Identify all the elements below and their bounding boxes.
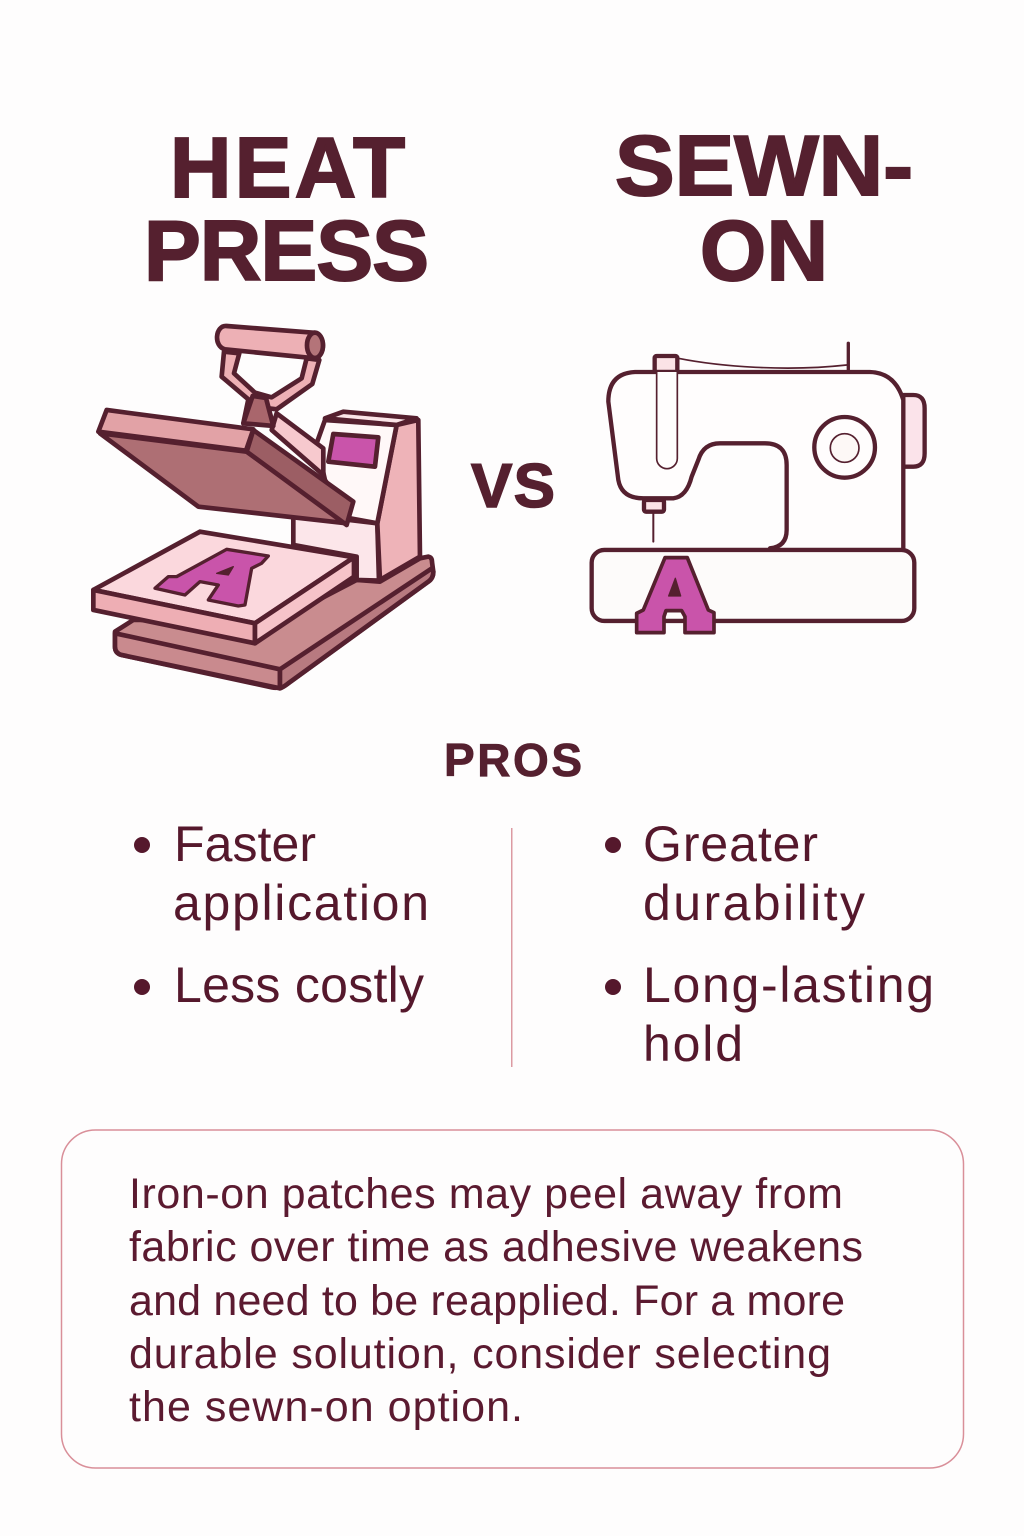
callout: iron-on note: fabric over time as adhesive weakens	[129, 1223, 863, 1271]
heading: heat press: PRESS	[144, 204, 429, 299]
callout: iron-on note	[62, 1130, 964, 1468]
list: sewn-on pros: Greater	[643, 816, 818, 872]
list: heat press pros: Faster	[174, 816, 316, 872]
callout: iron-on note: Iron-on patches may peel away from	[129, 1170, 843, 1218]
heading: heat press: HEAT	[170, 121, 405, 216]
patch letter A	[637, 558, 714, 633]
heading: sewn-on	[615, 119, 913, 299]
list: sewn-on pros	[605, 816, 934, 1072]
list: heat press pros: Less costly	[174, 957, 424, 1013]
label: vs: VS	[471, 452, 555, 521]
heading: heat press	[144, 121, 429, 299]
icon: sewing machine	[592, 343, 925, 633]
list: heat press pros: application	[173, 875, 429, 931]
list: sewn-on pros: durability	[643, 875, 865, 931]
callout: iron-on note: durable solution, consider selecting	[129, 1330, 831, 1378]
icon: heat press machine	[93, 326, 433, 688]
list: sewn-on pros: hold	[643, 1016, 743, 1072]
callout: iron-on note: the sewn-on option.	[129, 1383, 523, 1431]
callout: iron-on note: and need to be reapplied. For a more	[129, 1277, 845, 1325]
heading: pros: PROS	[444, 734, 582, 786]
list: heat press pros	[134, 816, 429, 1013]
heading: sewn-on: SEWN-	[615, 119, 913, 214]
list: sewn-on pros: Long-lasting	[643, 957, 934, 1013]
heading: sewn-on: ON	[700, 204, 828, 299]
patch letter A	[155, 549, 268, 606]
